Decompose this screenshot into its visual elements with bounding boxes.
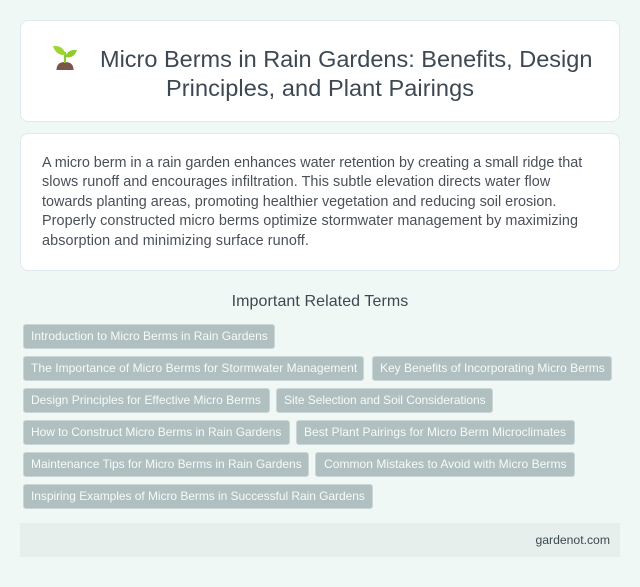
- tag: [23, 420, 290, 445]
- tag: [276, 388, 493, 413]
- title: Principles, and Plant Pairings: [166, 75, 474, 101]
- footer bar: [20, 523, 620, 557]
- tag: [23, 484, 373, 509]
- text block: description: [42, 155, 582, 249]
- tag: [23, 356, 364, 381]
- tag: Key Benefits of Incorporating Micro Berms: [380, 361, 605, 375]
- heading: related terms: Important Related Terms: [232, 293, 408, 310]
- tag: How to Construct Micro Berms in Rain Gardens: [31, 425, 281, 439]
- tag: [23, 388, 270, 413]
- footer text: gardenot.com: [535, 533, 610, 547]
- tag: [315, 452, 575, 477]
- text block: description: A micro berm in a rain garden enhances water retention by creating a small ridge that: [42, 155, 582, 171]
- text block: description: Properly constructed micro berms optimize stormwater management by maximizing: [42, 213, 578, 229]
- tag: Common Mistakes to Avoid with Micro Berms: [324, 457, 567, 471]
- title: Micro Berms in Rain Gardens: Benefits, Design: [100, 46, 592, 72]
- tag: Site Selection and Soil Considerations: [284, 393, 486, 407]
- tag: [23, 452, 309, 477]
- panel: description card: [20, 133, 620, 271]
- tag: [372, 356, 612, 381]
- tag: Best Plant Pairings for Micro Berm Microclimates: [304, 425, 566, 439]
- tag: Maintenance Tips for Micro Berms in Rain Gardens: [31, 457, 302, 471]
- text block: description: absorption and minimizing surface runoff.: [42, 233, 309, 249]
- tag: Design Principles for Effective Micro Berms: [31, 393, 261, 407]
- icon: seedling: [53, 46, 77, 70]
- title: [100, 46, 592, 101]
- tag: [23, 324, 275, 349]
- tag: Introduction to Micro Berms in Rain Gardens: [31, 329, 268, 343]
- tag: The Importance of Micro Berms for Stormwater Management: [31, 361, 357, 375]
- tag list: related terms: [23, 324, 612, 509]
- text block: description: slows runoff and encourages infiltration. This subtle elevation directs water flow: [42, 174, 550, 190]
- tag: Inspiring Examples of Micro Berms in Successful Rain Gardens: [31, 489, 365, 503]
- panel: title card: [20, 20, 620, 122]
- tag: [296, 420, 575, 445]
- text block: description: towards planting areas, promoting healthier vegetation and reducing soil erosion.: [42, 194, 556, 210]
